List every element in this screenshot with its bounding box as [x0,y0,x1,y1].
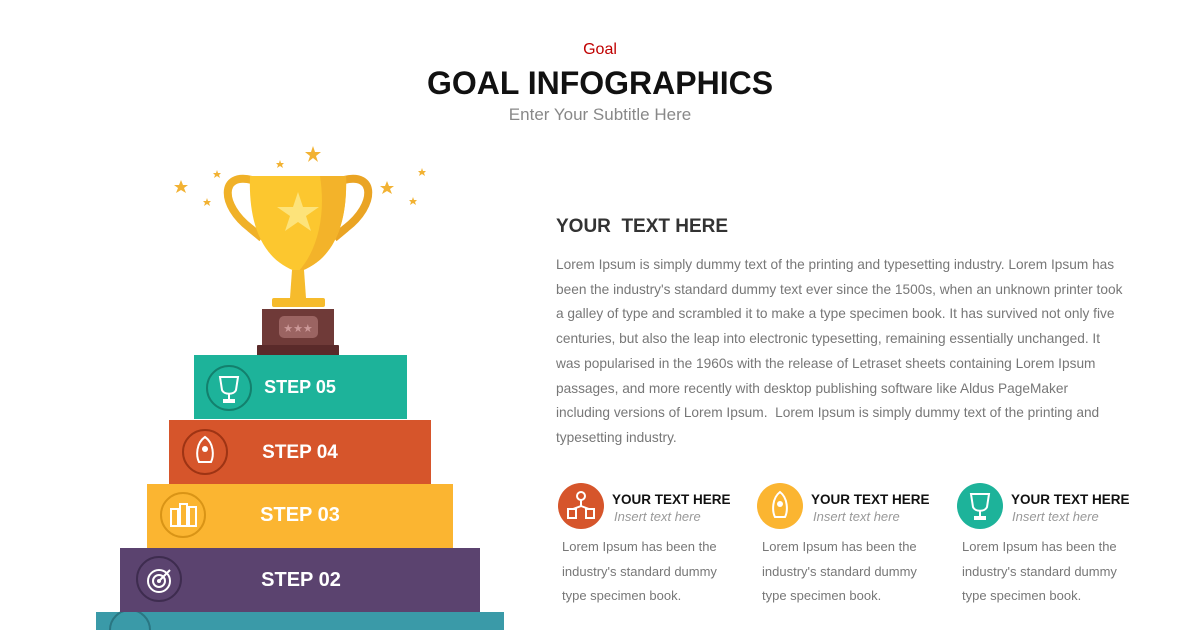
icon: team [558,483,604,529]
step 05 [194,355,407,419]
item 2: Lorem Ipsum has been the industry's standard dummy type specimen book. [762,539,917,603]
main paragraph: centuries, but also the leap into electronic typesetting, remaining essentially unchanged. It [556,331,1100,346]
item 1 [558,483,731,603]
step 05: STEP 05 [264,377,336,397]
step 04: STEP 04 [262,442,338,463]
step 03 [147,484,453,548]
title: GOAL INFOGRAPHICS [427,65,773,101]
trophy [228,176,368,356]
main paragraph: typesetting industry. [556,430,677,445]
item 3: YOUR TEXT HERE [1011,492,1130,507]
icon: rocket [757,483,803,529]
step 04 [169,420,431,484]
main paragraph: including versions of Lorem Ipsum. Lorem Ipsum is simply dummy text of the printing and [556,405,1099,420]
item 3: Insert text here [1012,509,1099,524]
step 02: STEP 02 [261,569,341,591]
item 1: YOUR TEXT HERE [612,492,731,507]
item 2: YOUR TEXT HERE [811,492,930,507]
item 2: Insert text here [813,509,900,524]
item 1: Lorem Ipsum has been the industry's standard dummy type specimen book. [562,539,717,603]
item 3 [957,483,1130,603]
step 01 [96,610,504,630]
step 03: STEP 03 [260,504,340,526]
trophy: ★★★ [283,323,313,335]
item 1: Insert text here [614,509,701,524]
small heading: Goal [583,41,617,58]
main paragraph: passages, and more recently with desktop publishing software like Aldus PageMaker [556,381,1068,396]
main paragraph: been the industry's standard dummy text ever since the 1500s, when an unknown printer took [556,282,1122,297]
main paragraph: Lorem Ipsum is simply dummy text of the printing and typesetting industry. Lorem Ipsum has [556,257,1114,272]
subtitle: Enter Your Subtitle Here [509,105,691,124]
icon: trophy [957,483,1003,529]
step 02 [120,548,480,612]
stars [174,146,426,206]
main heading: YOUR TEXT HERE [556,216,728,237]
item 2 [757,483,930,603]
main paragraph: was popularised in the 1960s with the release of Letraset sheets containing Lorem Ipsum [556,356,1095,371]
main paragraph: a galley of type and scrambled it to make a type specimen book. It has survived not only five [556,306,1114,321]
main paragraph [556,257,1122,445]
item 3: Lorem Ipsum has been the industry's standard dummy type specimen book. [962,539,1117,603]
